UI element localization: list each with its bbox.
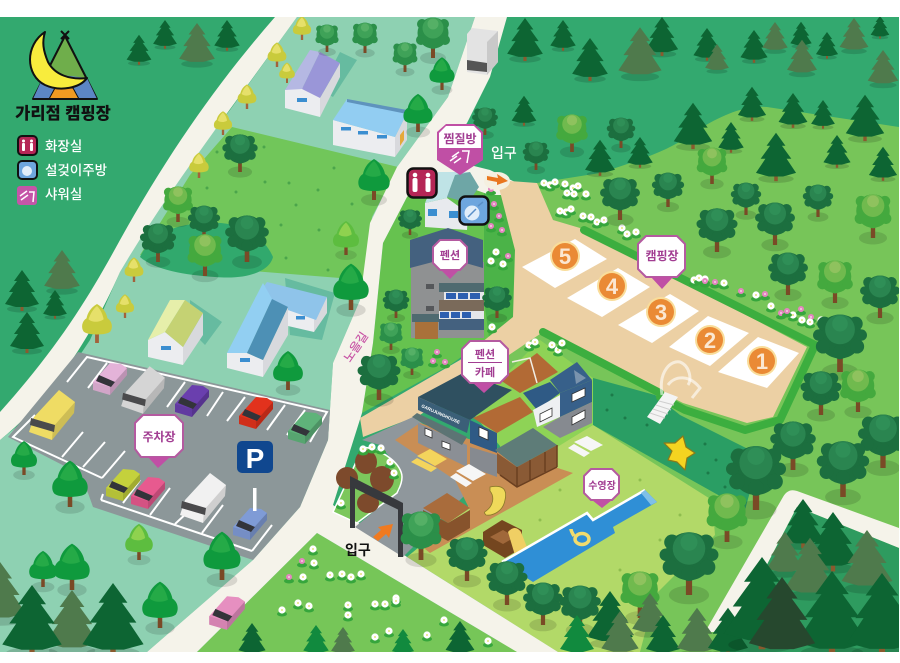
pin: pension cafe: 펜션 (475, 348, 495, 361)
center grey wall (470, 447, 497, 477)
mint parcel between the roads (0, 17, 475, 652)
orange gable roof (473, 397, 533, 433)
legend icon: dish washing (18, 161, 37, 179)
picnic tables (411, 436, 603, 487)
central green field (140, 127, 398, 280)
pension building (410, 228, 484, 339)
middle blue wing (523, 382, 560, 410)
purple building (285, 50, 357, 117)
pension garden (362, 190, 489, 413)
wooden deck (395, 423, 573, 553)
shower and kitchen house (425, 172, 479, 230)
lawn dots (538, 444, 692, 626)
south entrance label: 입구 (345, 542, 371, 558)
pines: south west (0, 562, 144, 660)
L shaped blue building (227, 278, 335, 377)
east meadow (500, 107, 899, 652)
dark main roof (418, 373, 512, 420)
jar garden (333, 447, 402, 523)
parking sign: P (246, 443, 264, 474)
logo tent (33, 31, 97, 99)
icon: dish washing on map (460, 196, 488, 224)
yellow tables (411, 449, 447, 472)
site 4: 4 (606, 274, 619, 299)
entrance spur (432, 160, 514, 195)
gazebo (423, 493, 470, 541)
parking lines (13, 357, 327, 551)
legend (17, 136, 107, 205)
banana sculpture (484, 486, 506, 515)
center window (479, 427, 488, 440)
dark lawn strip (593, 378, 760, 510)
flowers (277, 178, 826, 648)
parking sign (237, 441, 273, 511)
trees: south west (11, 441, 441, 635)
parking lot (8, 352, 330, 560)
pin: pension cafe (462, 341, 508, 393)
earthenware jars (336, 450, 394, 513)
back orange roof (500, 353, 558, 393)
lower eave (412, 413, 467, 445)
site 2: 2 (704, 328, 716, 353)
site 5 (522, 239, 607, 288)
stairs (647, 392, 678, 424)
orange arrow into courtyard (373, 524, 393, 541)
road label: 노을길 (341, 329, 371, 365)
logo (30, 31, 97, 99)
dark strip dots (606, 394, 734, 488)
blue building (333, 99, 407, 157)
site 4 (567, 268, 650, 317)
lower front wall (418, 423, 467, 467)
white tables (450, 436, 603, 487)
logo moon (30, 32, 87, 89)
pin: sauna (437, 124, 483, 175)
site 3 (618, 294, 699, 343)
legend icon: shower (17, 186, 37, 205)
center blue wall (470, 420, 497, 453)
left road (0, 17, 297, 440)
garden strip (484, 193, 515, 336)
forest enclosure (720, 507, 899, 652)
dark grove patch (140, 223, 273, 278)
pin: sauna: 찜질방 (443, 132, 477, 146)
back roof ridge (512, 358, 537, 383)
trees: south of pool (446, 537, 660, 637)
car on road (209, 596, 245, 630)
decorative arch (661, 362, 700, 398)
trees: east meadow (600, 148, 900, 604)
site 2 (669, 316, 749, 366)
south meadow (197, 533, 517, 652)
porch railing (500, 445, 557, 487)
front windows (425, 428, 450, 450)
cafe lawn (475, 340, 593, 447)
legend text: shower: 샤워실 (45, 187, 82, 202)
title: 가리점 캠핑장 (15, 104, 111, 123)
duck float (571, 529, 589, 544)
camp field and driveway (360, 180, 807, 437)
south east road (705, 490, 899, 632)
right windows (540, 388, 585, 425)
field dots (206, 146, 354, 272)
yellow green building (148, 300, 222, 365)
pin: parking: 주차장 (142, 430, 176, 444)
site 3: 3 (655, 300, 667, 325)
pin: camp site: 캠핑장 (645, 249, 679, 263)
pin: pension cafe: 카페 (475, 365, 495, 379)
trees and pines: north east (507, 16, 898, 183)
pines: north west (5, 20, 240, 354)
pool lawn (407, 425, 715, 652)
hedge (543, 230, 815, 430)
pines: south east (560, 591, 748, 658)
porch roof (495, 428, 557, 467)
entrance arrow (484, 172, 510, 190)
site 1: 1 (756, 349, 768, 374)
entrance gate (350, 476, 403, 557)
residential buildings (148, 50, 484, 377)
van on road (467, 28, 498, 75)
entrance label: 입구 (491, 145, 517, 161)
trees: west side (82, 16, 512, 407)
icon: toilet on map (408, 168, 436, 198)
pin: parking (135, 415, 183, 468)
pines: south centre (238, 621, 474, 657)
legend icon: toilet (18, 136, 37, 155)
pin: pension: 펜션 (440, 249, 460, 262)
pin: swimming pool: 수영장 (588, 479, 616, 492)
right gable peak (574, 370, 586, 384)
asphalt (8, 352, 330, 560)
front signboard wall (418, 397, 470, 433)
porch (497, 445, 557, 487)
paved courtyard (355, 417, 464, 557)
wooden play structure (483, 520, 540, 565)
legend text: dish washing: 설겆이주방 (45, 163, 107, 178)
central road (147, 17, 558, 652)
parked cars (29, 363, 322, 540)
site 1 (718, 337, 799, 388)
camp sites (522, 239, 799, 388)
pin: camp site (638, 236, 685, 289)
star sculpture (664, 436, 695, 470)
swimming pool (502, 490, 657, 582)
front signboard wall: GARUJUNGHOUSE (421, 403, 461, 425)
right gable (550, 362, 592, 393)
pines: fenced forest (724, 499, 900, 660)
pin: pension (433, 240, 467, 279)
cafe building (412, 353, 592, 487)
site 5: 5 (559, 244, 571, 269)
legend text: toilet: 화장실 (45, 139, 82, 154)
pin: swimming pool (584, 469, 619, 508)
